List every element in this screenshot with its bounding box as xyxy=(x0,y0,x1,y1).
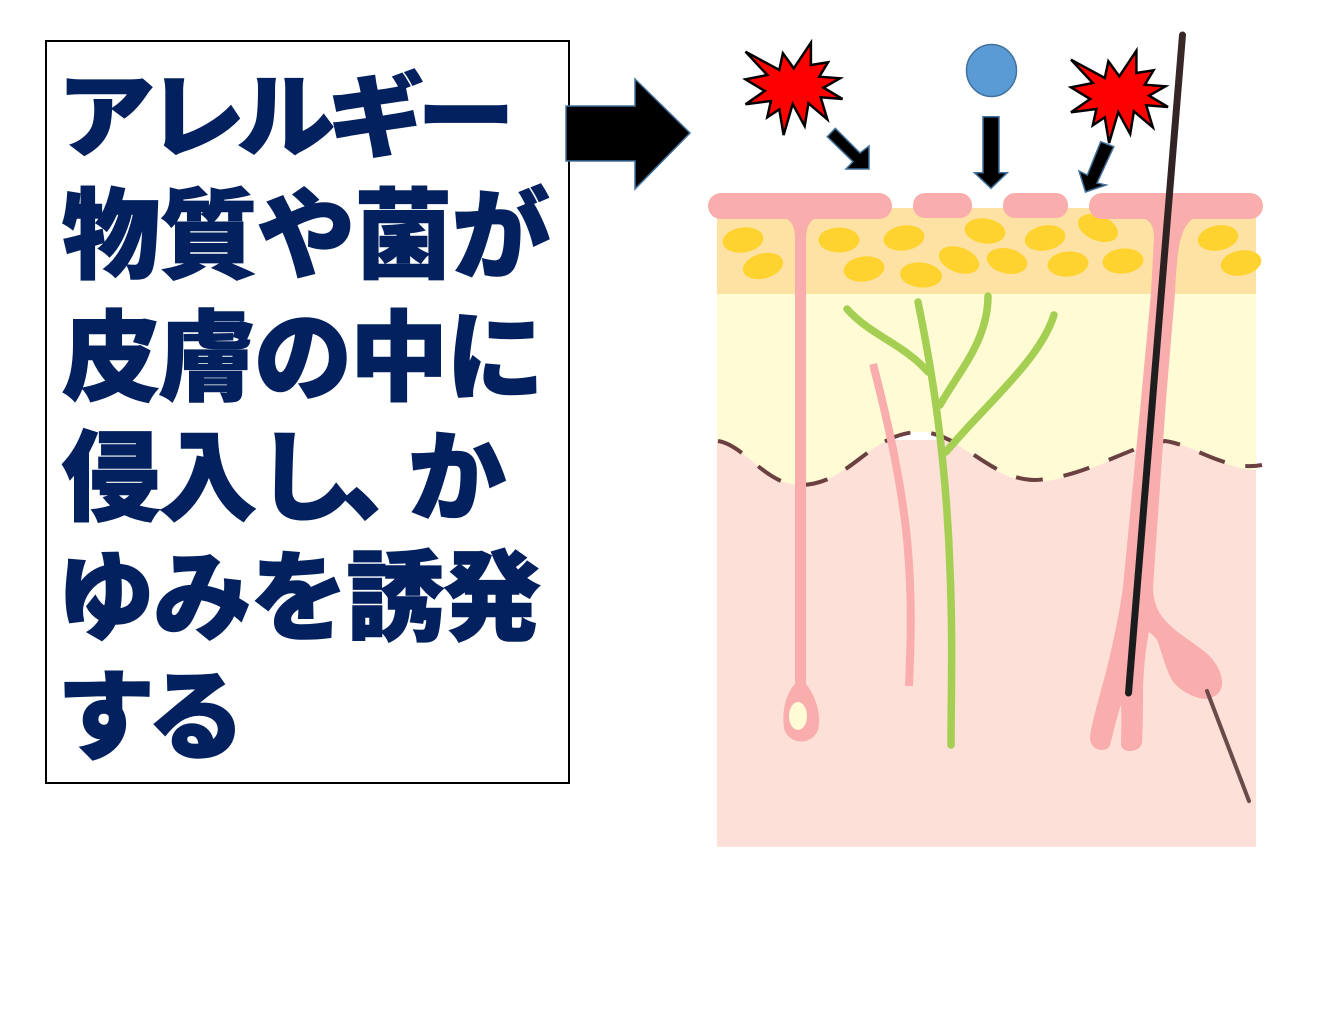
fat cells xyxy=(721,209,1263,289)
arrow: right particle xyxy=(1079,142,1114,192)
nerve xyxy=(847,296,1054,745)
skin layers xyxy=(717,208,1256,847)
hair xyxy=(1128,35,1182,693)
arrow: center particle xyxy=(974,117,1007,188)
allergen burst right xyxy=(1071,51,1168,143)
arrow: left particle xyxy=(827,128,869,169)
text box: allergy explanation: 皮膚の中に xyxy=(62,303,542,413)
allergen burst left xyxy=(746,43,842,135)
blood vessel xyxy=(873,364,911,686)
text box: allergy explanation xyxy=(45,40,570,784)
epidermis surface xyxy=(708,193,1263,219)
text box: allergy explanation: 物質や菌が xyxy=(62,181,550,291)
hair follicle xyxy=(1090,217,1222,751)
arrow: text to diagram xyxy=(566,79,690,189)
sweat gland xyxy=(782,217,819,741)
text box: allergy explanation: ゆみを誘発 xyxy=(57,543,540,653)
small hair xyxy=(1207,691,1249,801)
blue particle xyxy=(966,44,1016,96)
dashed boundary line xyxy=(718,432,1262,485)
text box: allergy explanation: アレルギー xyxy=(57,66,507,168)
text box: allergy explanation: 侵入し、か xyxy=(62,423,505,533)
text box: allergy explanation: する xyxy=(57,662,237,772)
